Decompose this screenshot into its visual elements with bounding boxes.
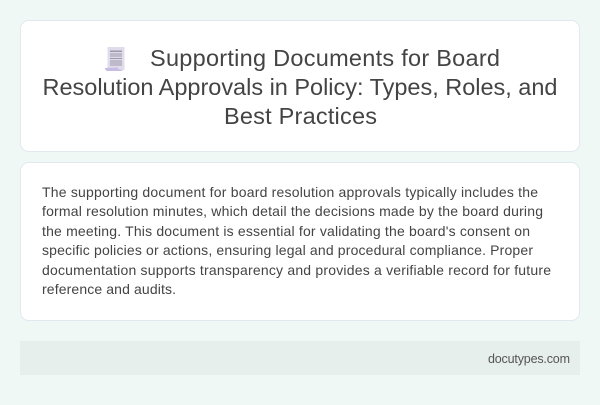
heading: Resolution Approvals in Policy: Types, Roles, and bbox=[42, 74, 558, 100]
text block: description: specific policies or actions, ensuring legal and procedural compliance. Proper bbox=[42, 242, 533, 258]
text block: description: the meeting. This document is essential for validating the board's consent on bbox=[42, 223, 530, 239]
icon: document scroll bbox=[105, 47, 124, 71]
heading bbox=[42, 45, 558, 129]
text block: description: documentation supports transparency and provides a verifiable record for future bbox=[42, 262, 551, 278]
heading: Best Practices bbox=[224, 103, 377, 129]
heading: Supporting Documents for Board bbox=[150, 45, 500, 71]
panel: title card bbox=[20, 20, 580, 152]
text block: description: reference and audits. bbox=[42, 281, 176, 297]
footer source text: docutypes.com bbox=[488, 352, 570, 366]
text block: description: The supporting document for board resolution approvals typically includes the bbox=[42, 184, 538, 200]
panel: description card bbox=[20, 162, 580, 320]
footer bar bbox=[20, 341, 580, 375]
text block: description: formal resolution minutes, which detail the decisions made by the board during bbox=[42, 203, 543, 219]
text block: description bbox=[42, 184, 551, 297]
